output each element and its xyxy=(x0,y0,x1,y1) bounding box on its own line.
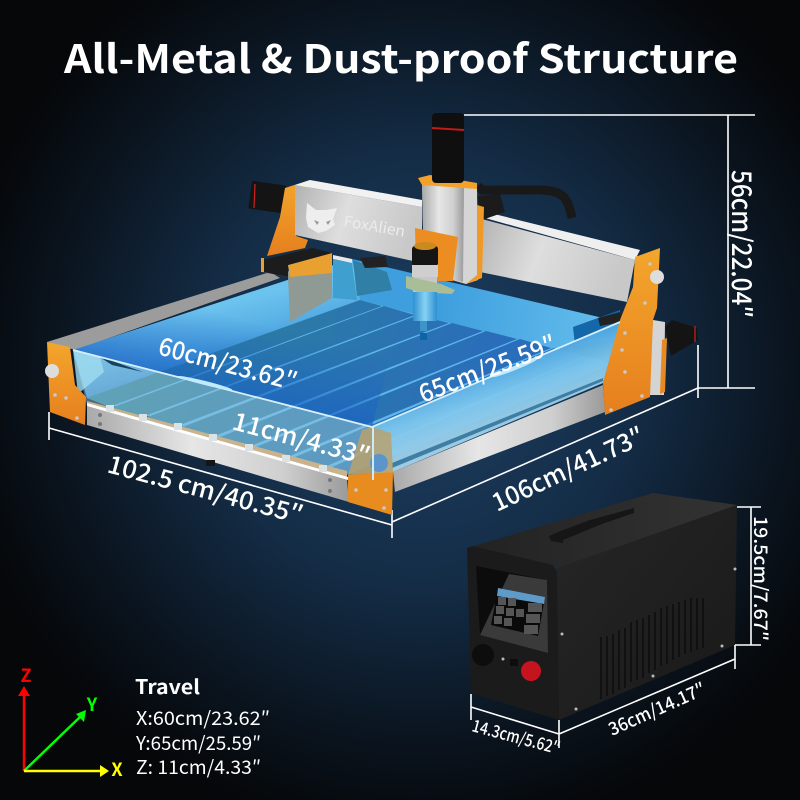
left glass end xyxy=(73,350,104,394)
fox logo: FoxAlien xyxy=(342,210,407,242)
left inner wall xyxy=(73,259,360,398)
label: box length: 36cm/14.17″ xyxy=(604,675,709,741)
travel list: Y:65cm/25.59″ xyxy=(135,729,261,756)
front tan slot strip xyxy=(87,401,347,480)
box top area xyxy=(73,259,620,427)
label: box width: 14.3cm/5.62″ xyxy=(470,712,563,759)
CNC machine xyxy=(45,113,698,515)
box side xyxy=(557,505,737,720)
fox logo xyxy=(306,203,407,242)
left knob xyxy=(45,364,59,378)
Z axis: Z xyxy=(20,662,32,688)
rail screws xyxy=(98,413,332,493)
dark sliver xyxy=(98,356,143,372)
front rail feet xyxy=(206,460,215,466)
label: machine width: 102.5 cm/40.35″ xyxy=(104,445,307,532)
label: machine depth: 106cm/41.73″ xyxy=(485,417,650,519)
box top xyxy=(467,493,737,568)
spindle xyxy=(406,242,455,340)
title: All-Metal & Dust-proof Structure xyxy=(63,29,738,85)
clamp ticks xyxy=(106,405,327,472)
label: Y travel: 65cm/25.59″ xyxy=(413,325,561,410)
travel list: X:60cm/23.62″ xyxy=(136,704,270,731)
front right plate top through glass xyxy=(348,427,393,475)
bed floor xyxy=(87,300,612,475)
label: box height: 19.5cm/7.67″ xyxy=(748,516,775,641)
right silver rail xyxy=(393,385,605,492)
right orange plate xyxy=(603,248,660,415)
gantry beam xyxy=(295,185,422,263)
back left rail xyxy=(47,272,280,350)
travel list xyxy=(135,671,270,780)
X axis: X xyxy=(111,756,123,782)
left carriage seen through glass xyxy=(261,248,392,322)
right motor and side block xyxy=(648,320,698,395)
travel list: Z: 11cm/4.33″ xyxy=(136,753,261,780)
box front xyxy=(467,546,559,720)
front right orange plate xyxy=(348,472,393,515)
label: X travel: 60cm/23.62″ xyxy=(155,327,301,398)
screen recess xyxy=(476,566,548,653)
control box xyxy=(467,493,737,720)
handle xyxy=(549,508,634,543)
screws xyxy=(502,568,736,710)
dimension lines: control box xyxy=(471,507,761,748)
right knob xyxy=(650,270,664,284)
front silver rail xyxy=(87,405,349,502)
screen xyxy=(491,588,545,636)
Z motor xyxy=(432,113,464,183)
Z carriage xyxy=(415,113,484,284)
left Y motor xyxy=(248,181,287,213)
axis diagram xyxy=(18,662,123,782)
glass top edges xyxy=(73,322,620,427)
bed slats xyxy=(87,300,612,475)
cable chain xyxy=(478,186,572,218)
vent slots xyxy=(601,598,703,699)
deep blue glow along front edge xyxy=(74,314,386,426)
travel list: Travel xyxy=(135,671,200,700)
left gantry plate xyxy=(267,180,310,256)
plate bolts xyxy=(53,262,652,510)
dimension lines: machine xyxy=(49,115,755,538)
label: Z travel: 11cm/4.33″ xyxy=(229,402,374,473)
front glass panel xyxy=(73,350,372,480)
emergency stop xyxy=(521,661,541,681)
switch xyxy=(510,659,518,666)
Y axis: Y xyxy=(86,691,98,717)
dark blue right carriage xyxy=(573,310,622,346)
label: machine height: 56cm/22.04″ xyxy=(724,170,763,318)
white corner wall xyxy=(333,255,352,263)
screen buttons xyxy=(494,597,542,634)
right glass panel xyxy=(372,322,620,480)
left front plate xyxy=(47,342,86,425)
knob xyxy=(472,644,494,666)
Z orange plate xyxy=(415,228,458,281)
